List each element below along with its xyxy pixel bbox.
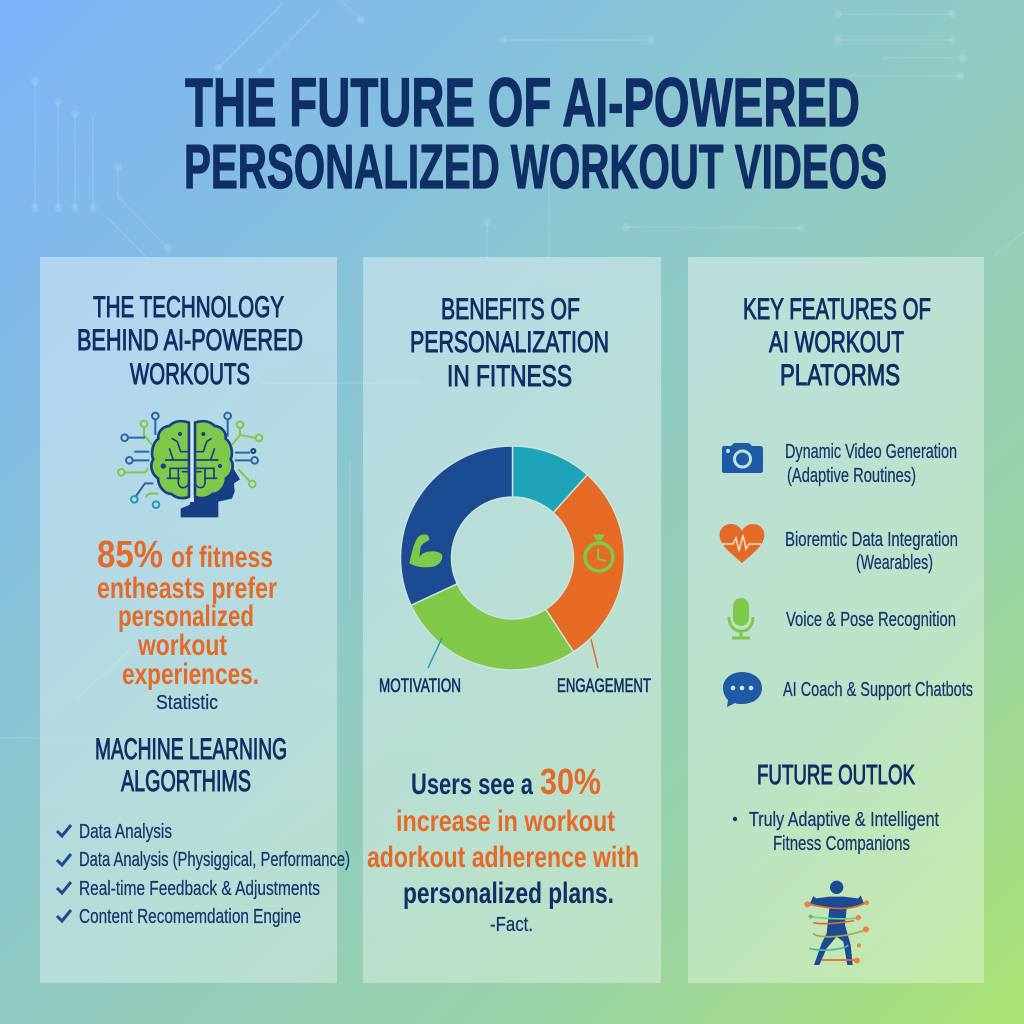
heading: technology: WORKOUTS xyxy=(130,358,250,391)
feature: AI coach xyxy=(723,672,973,707)
heading: benefits: BENEFITS OF xyxy=(441,293,580,326)
statistic text: Statistic xyxy=(156,692,218,714)
feature: biometric data: Bioremtic Data Integration xyxy=(785,529,958,551)
panel: technology xyxy=(40,257,350,983)
donut chart xyxy=(401,446,624,670)
feature: biometric data: (Wearables) xyxy=(856,552,933,574)
icon: heart xyxy=(720,524,764,563)
statistic text xyxy=(97,534,277,714)
fact text: 30% xyxy=(540,761,601,802)
fact text: increase in workout xyxy=(396,805,615,838)
checklist: Data Analysis xyxy=(79,821,172,843)
label: engagement: ENGAGEMENT xyxy=(557,676,651,697)
label: engagement xyxy=(557,639,651,697)
checklist: Real-time Feedback & Adjustments xyxy=(79,878,320,900)
fact text: Users see a xyxy=(411,768,533,801)
heading: benefits: PERSONALIZATION xyxy=(410,326,609,359)
heading: features: AI WORKOUT xyxy=(769,326,904,359)
heading: technology: THE TECHNOLOGY xyxy=(93,291,284,324)
fact text: personalized plans. xyxy=(403,877,614,910)
feature: video generation xyxy=(722,441,957,487)
checklist: Content Recomemdation Engine xyxy=(79,906,301,928)
statistic text: experiences. xyxy=(122,658,259,691)
heading: machine learning: MACHINE LEARNING xyxy=(95,733,287,766)
feature: video generation: (Adaptive Routines) xyxy=(787,465,916,487)
heading: technology: BEHIND AI-POWERED xyxy=(77,324,303,357)
statistic text: personalized xyxy=(118,600,254,633)
checklist: Data Analysis (Physiggical, Performance) xyxy=(79,849,350,871)
label: motivation: MOTIVATION xyxy=(379,676,461,697)
icon: microphone xyxy=(729,598,753,638)
outlook text xyxy=(733,809,939,855)
fact text xyxy=(367,761,639,936)
heading: technology xyxy=(77,291,303,391)
feature: biometric data xyxy=(720,524,958,574)
icon: muscle arm xyxy=(409,534,442,567)
outlook text: Truly Adaptive & Intelligent xyxy=(749,809,939,831)
heading: benefits: IN FITNESS xyxy=(447,360,572,393)
heading: features: PLATORMS xyxy=(780,359,900,392)
heading: benefits xyxy=(410,293,609,393)
icon: camera xyxy=(722,443,763,473)
heading: machine learning: ALGORTHIMS xyxy=(121,765,251,798)
label: motivation xyxy=(379,638,461,697)
outlook text: Fitness Companions xyxy=(773,833,910,855)
panel: benefits xyxy=(363,257,661,983)
heading: features xyxy=(743,293,931,392)
fact text: adorkout adherence with xyxy=(367,841,639,874)
icon: figure with rings xyxy=(804,881,869,965)
statistic text: workout xyxy=(137,629,227,662)
feature: voice and pose: Voice & Pose Recognition xyxy=(786,609,956,631)
heading: machine learning xyxy=(95,733,287,798)
icon: brain and circuits xyxy=(118,413,262,517)
statistic text: of fitness xyxy=(171,541,273,574)
icon: stopwatch xyxy=(585,535,613,571)
feature: voice and pose xyxy=(729,598,956,638)
heading: future outlook: FUTURE OUTLOK xyxy=(757,759,915,790)
statistic text: entheasts prefer xyxy=(97,572,277,605)
fact text: -Fact. xyxy=(490,914,533,936)
icon: chat bubble xyxy=(723,672,762,707)
title xyxy=(184,64,887,202)
heading: features: KEY FEATURES OF xyxy=(743,293,931,326)
feature: video generation: Dynamic Video Generation xyxy=(785,441,957,463)
panel: features xyxy=(688,257,984,983)
checklist xyxy=(57,821,350,928)
statistic text: 85% xyxy=(97,534,163,576)
